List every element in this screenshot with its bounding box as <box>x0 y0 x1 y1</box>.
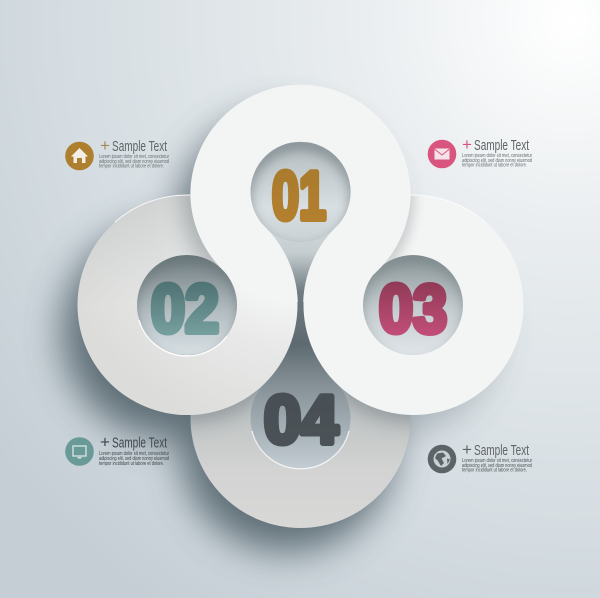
shadow of top circle on right ring <box>384 195 419 264</box>
text block: tempor incididunt ut labore et dolore. <box>462 468 527 474</box>
hole 02 rim highlight <box>139 320 227 356</box>
hole 04 <box>250 368 350 468</box>
text block: Lorem ipsum dolor sit met, consectetur <box>99 154 169 160</box>
heading: Sample Text <box>112 436 167 452</box>
callout: home <box>65 136 169 170</box>
heading: Sample Text <box>112 139 167 155</box>
number 04: 04 <box>264 382 338 458</box>
number 03: 03 <box>379 271 447 347</box>
hole 01 inner shadow <box>250 142 350 242</box>
shadow from upper rings on bottom ring <box>190 337 410 431</box>
text block: adipiscing elit, sed diam nonny eiusmod <box>99 456 169 462</box>
hole 02 <box>137 255 237 355</box>
callout: mail <box>428 135 532 168</box>
icon: globe <box>428 445 456 473</box>
panel: circle 02 <box>78 194 298 415</box>
icon: monitor <box>65 437 94 466</box>
gap between left and right circles <box>262 192 339 382</box>
heading: Sample Text <box>474 443 529 459</box>
heading: + <box>100 432 110 452</box>
text block: adipiscing elit, sed diam nonny eiusmod <box>462 158 532 164</box>
callout: globe <box>428 440 532 474</box>
text block: tempor incididunt ut labore et dolore. <box>99 164 164 170</box>
left ring top edge highlight <box>115 195 190 222</box>
hole 02 inner shadow <box>137 259 237 349</box>
text block: tempor incididunt ut labore et dolore. <box>99 461 164 467</box>
number 01: 01 <box>272 158 326 234</box>
heading: Sample Text <box>474 138 529 154</box>
panel: circle 01 ring joined into S shape <box>190 85 411 302</box>
number 02: 02 <box>151 271 219 347</box>
panel: circle 04 <box>190 382 410 528</box>
text block: Lorem ipsum dolor sit met, consectetur <box>462 153 532 159</box>
hole 04 rim highlight <box>252 431 349 469</box>
heading: + <box>100 136 110 155</box>
left ring top tone <box>86 195 212 270</box>
text block: Lorem ipsum dolor sit met, consectetur <box>462 458 532 464</box>
heading: + <box>462 440 472 459</box>
icon: envelope <box>428 140 456 168</box>
panel: circle 01 hole <box>250 142 350 242</box>
left ring <box>77 195 298 415</box>
heading: + <box>462 135 472 154</box>
shadow of top circle on left ring <box>173 195 220 268</box>
hole 03 inner shadow <box>363 255 463 348</box>
right ring <box>304 195 524 415</box>
right ring top edge highlight <box>411 195 486 223</box>
text block: Lorem ipsum dolor sit met, consectetur <box>99 451 169 457</box>
bottom ring <box>190 308 410 528</box>
text block: adipiscing elit, sed diam nonny eiusmod <box>462 463 532 469</box>
hole 03 <box>363 255 463 355</box>
icon: home <box>65 142 94 170</box>
drop shadow of the circle group <box>62 114 496 552</box>
text block: tempor incididunt ut labore et dolore. <box>462 162 527 168</box>
callout: monitor <box>65 432 169 467</box>
text block: adipiscing elit, sed diam nonny eiusmod <box>99 159 169 165</box>
panel: circle 03 <box>304 194 524 415</box>
hole 01 <box>250 142 350 242</box>
